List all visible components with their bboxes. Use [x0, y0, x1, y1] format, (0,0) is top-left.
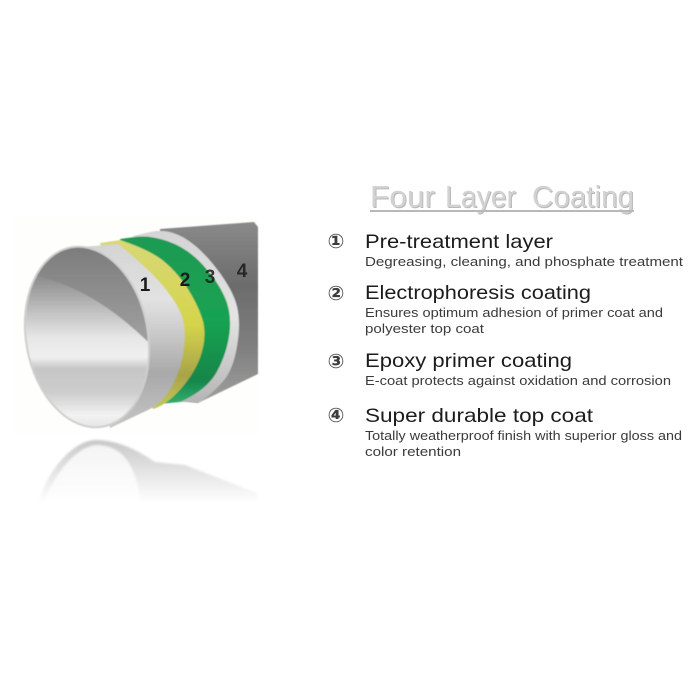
illustration: coated pipe cross-section [10, 222, 258, 438]
layer 2: yellow coat [100, 240, 204, 409]
item 1: pre-treatment layer [328, 229, 683, 269]
pipe mouth rim [10, 236, 164, 438]
layer 4: outer grey top coat [160, 222, 258, 403]
description 1: Degreasing, cleaning, and phosphate treatment [365, 254, 683, 269]
interior shadow [38, 248, 148, 342]
item 3: epoxy primer coating [328, 349, 671, 388]
description 2: Ensures optimum adhesion of primer coat and [365, 305, 663, 320]
description 4 [365, 428, 682, 459]
image backdrop panel [12, 216, 258, 434]
number 1: 1 [140, 275, 151, 296]
item 4: super durable top coat [328, 403, 682, 459]
description 2: polyester top coat [365, 321, 484, 336]
title: Four [370, 179, 435, 214]
title: Four [371, 180, 436, 215]
title: Coating [533, 180, 635, 215]
layer 3: green coat [120, 237, 230, 405]
layer numbers on the pipe [140, 261, 248, 296]
marker 1: ① [328, 229, 344, 253]
title: Coating [532, 179, 634, 214]
pipe interior [26, 247, 148, 426]
description 4: Totally weatherproof finish with superior gloss and [365, 428, 682, 443]
description 4: color retention [365, 444, 461, 459]
marker 2: ② [328, 281, 344, 305]
number 3: 3 [205, 267, 215, 288]
heading 3: Epoxy primer coating [365, 350, 572, 372]
title: Layer [445, 179, 516, 214]
number 2: 2 [180, 270, 190, 291]
heading 4: Super durable top coat [365, 405, 594, 427]
description 3: E-coat protects against oxidation and corrosion [365, 373, 671, 388]
item 2: electrophoresis coating [328, 281, 663, 336]
flange: pale rim between layers 3 and 4 [133, 231, 239, 402]
heading 2: Electrophoresis coating [365, 282, 591, 304]
marker 3: ③ [328, 349, 344, 373]
description 2 [365, 305, 663, 336]
title [370, 179, 635, 215]
number 4: 4 [237, 261, 248, 282]
layer 1: silver pre-treatment [80, 244, 185, 428]
marker 4: ④ [328, 403, 344, 427]
pipe reflection [38, 440, 258, 503]
title: Layer [446, 180, 517, 215]
heading 1: Pre-treatment layer [365, 231, 554, 253]
